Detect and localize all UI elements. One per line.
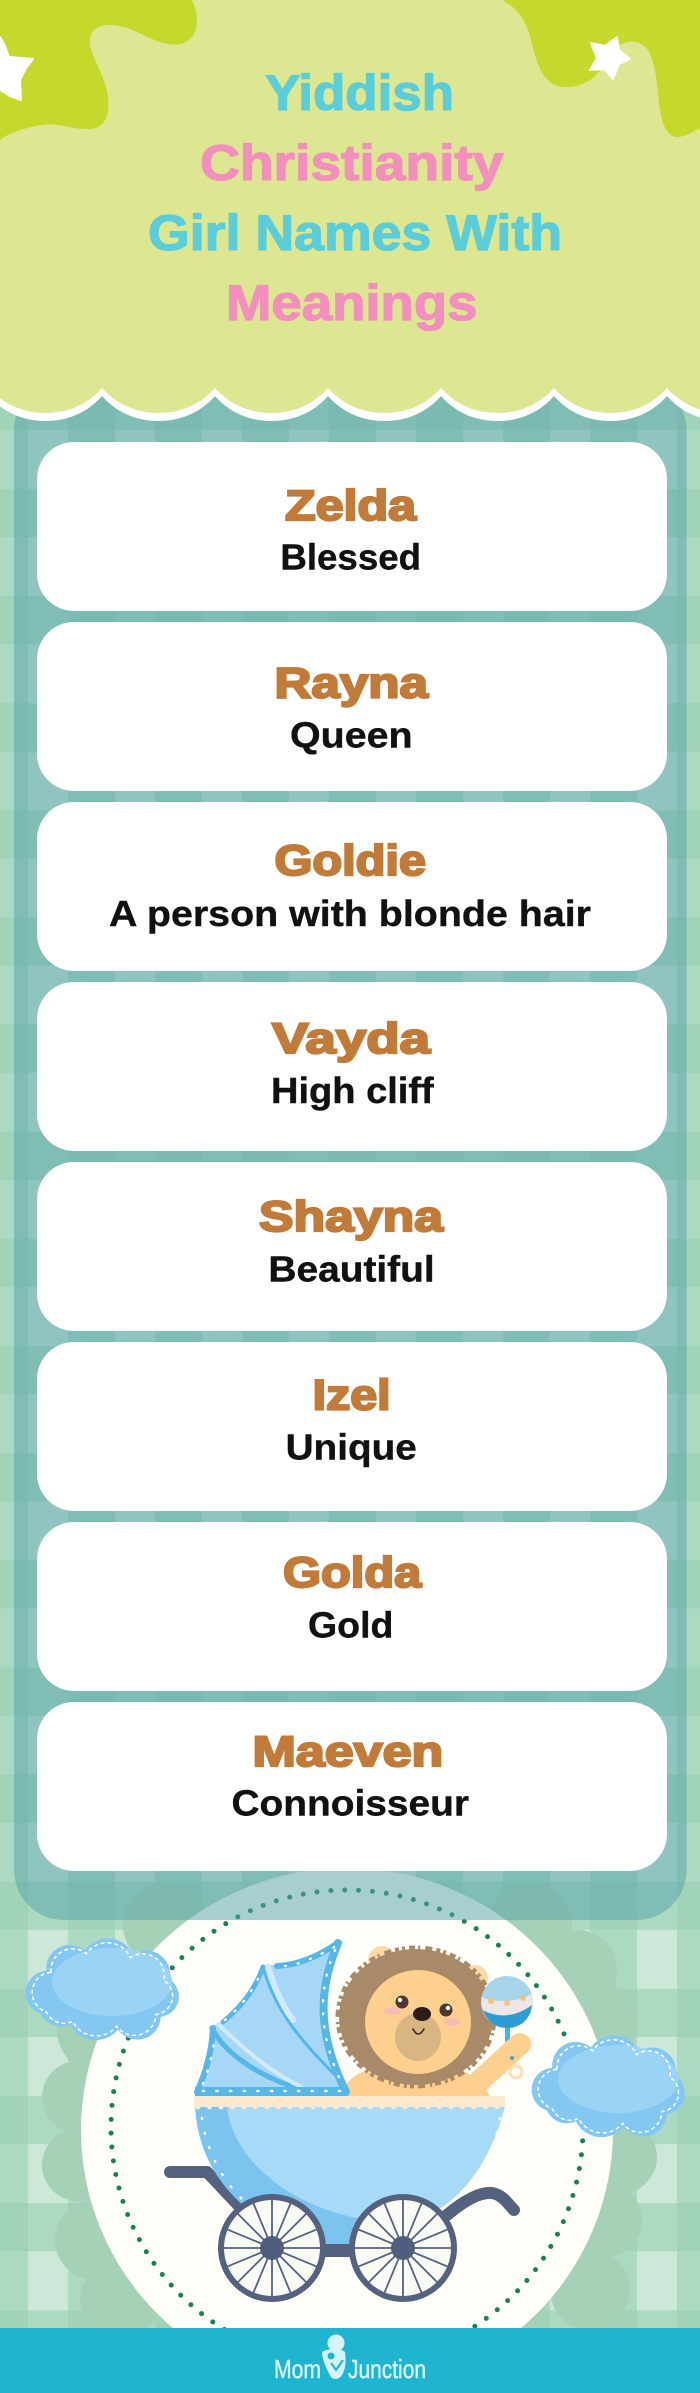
name: Zelda: Zelda	[285, 482, 417, 530]
header band with scalloped edge	[0, 0, 700, 421]
title line 1: Yiddish	[265, 65, 454, 121]
blob: top left corner	[0, 0, 197, 140]
left wheel	[221, 2197, 323, 2299]
title line 2: Christianity	[200, 135, 504, 191]
right wheel	[352, 2197, 454, 2299]
stroller basket	[194, 2096, 505, 2250]
meaning: Queen: Queen	[290, 714, 413, 755]
translucent teal panel	[14, 380, 687, 1920]
name: Maeven: Maeven	[252, 1728, 443, 1776]
white circle backdrop	[81, 1868, 613, 2392]
title line 4: Meanings	[226, 275, 478, 331]
card: Shayna	[37, 1162, 667, 1331]
meaning: Gold: Gold	[308, 1604, 393, 1645]
card: Zelda	[37, 442, 667, 611]
blob: top right corner	[502, 0, 700, 137]
meaning: A person with blonde hair: A person with blonde hair	[109, 893, 591, 934]
logo wordmark: Mom: Mom	[274, 2354, 321, 2384]
name: Shayna: Shayna	[259, 1193, 444, 1241]
star: top right	[590, 37, 630, 79]
title line 3: Girl Names With	[148, 205, 562, 261]
meaning: Beautiful: Beautiful	[268, 1248, 435, 1289]
dotted green ring	[111, 1890, 583, 2364]
meaning: High cliff: High cliff	[271, 1070, 435, 1111]
stroller axle	[322, 2244, 355, 2257]
stroller handles	[170, 2172, 514, 2215]
meaning: Connoisseur: Connoisseur	[232, 1782, 469, 1823]
card: Vayda	[37, 982, 667, 1151]
meaning: Blessed: Blessed	[280, 536, 421, 577]
logo icon: mother and baby	[322, 2334, 346, 2379]
name: Vayda: Vayda	[272, 1015, 431, 1063]
name: Golda: Golda	[283, 1549, 423, 1597]
star: top left	[0, 37, 33, 100]
logo wordmark: Junction: Junction	[348, 2354, 426, 2384]
card: Goldie	[37, 802, 667, 971]
MomJunction logo	[274, 2334, 426, 2384]
card: Rayna	[37, 622, 667, 791]
illustration: lion in baby stroller	[170, 1942, 533, 2299]
card: Maeven	[37, 1702, 667, 1871]
rattle	[481, 1976, 533, 2042]
stroller hood	[195, 1942, 348, 2096]
lion body	[340, 2070, 490, 2097]
card: Golda	[37, 1522, 667, 1691]
name: Goldie: Goldie	[274, 837, 426, 885]
scalloped green frame behind the circle	[42, 1883, 657, 2340]
lion head	[339, 1946, 493, 2085]
name: Izel: Izel	[313, 1371, 391, 1419]
meaning: Unique: Unique	[286, 1426, 417, 1467]
cloud: left	[26, 1938, 179, 2040]
title	[148, 65, 562, 331]
card: Izel	[37, 1342, 667, 1511]
cloud: right	[532, 2035, 685, 2137]
name: Rayna: Rayna	[274, 660, 429, 708]
lion arm	[440, 2044, 522, 2096]
footer bar	[0, 2328, 700, 2393]
